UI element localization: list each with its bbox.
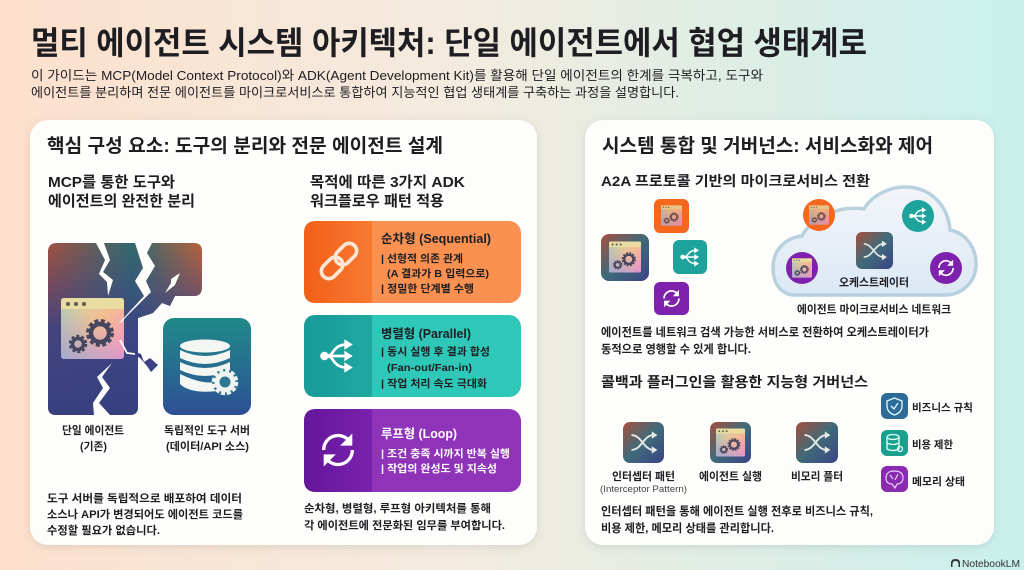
body text: governance — [601, 504, 873, 535]
card: sequential: 순차형 (Sequential) — [381, 231, 491, 246]
label: interceptor pattern: 인터셉터 패턴 — [612, 469, 675, 483]
body text: governance: 인터셉터 패턴을 통해 에이전트 실행 전후로 비즈니스 규칙, — [601, 504, 873, 518]
label: single agent: (기존) — [80, 439, 107, 453]
intro text — [31, 68, 763, 100]
card: loop — [304, 409, 521, 492]
subheading: MCP separation: MCP를 통한 도구와 — [48, 174, 175, 191]
card: parallel: 병렬형 (Parallel) — [381, 326, 471, 341]
icon: memory plugin — [796, 422, 838, 463]
card: parallel — [304, 315, 521, 397]
intro text: 이 가이드는 MCP(Model Context Protocol)와 ADK(Agent Development Kit)를 활용해 단일 에이전트의 한계를 극복하고, 도구와 — [31, 68, 763, 83]
card: sequential: | 선형적 의존 관계 — [381, 252, 463, 265]
body text: A2A: 에이전트를 네트워크 검색 가능한 서비스로 전환하여 오케스트레이터가 — [601, 325, 929, 339]
label: interceptor pattern: (Interceptor Pattern) — [600, 484, 687, 495]
card: loop: 루프형 (Loop) — [381, 426, 457, 441]
title: 멀티 에이전트 시스템 아키텍처: 단일 에이전트에서 협업 생태계로 — [31, 25, 867, 61]
icon: orange agent — [803, 199, 835, 231]
body text: tool server: 도구 서버를 독립적으로 배포하여 데이터 — [47, 491, 242, 505]
subheading: ADK workflow patterns: 워크플로우 패턴 적용 — [310, 193, 444, 210]
label: single agent — [62, 423, 124, 453]
icon: interceptor pattern — [623, 422, 664, 463]
icon: fan out — [320, 339, 353, 373]
label: agent microservice network: 에이전트 마이크로서비스 네트워크 — [797, 303, 951, 316]
card: sequential — [304, 221, 521, 303]
body text: workflow summary — [304, 501, 505, 532]
label: independent tool server — [164, 424, 250, 453]
body text: workflow summary: 순차형, 병렬형, 루프형 아키텍처를 통해 — [304, 501, 491, 515]
icon group: separate agents — [601, 199, 707, 315]
subheading: governance: 콜백과 플러그인을 활용한 지능형 거버넌스 — [601, 374, 868, 390]
icon: purple loop agent — [930, 252, 962, 284]
panel heading: system integration: 시스템 통합 및 거버넌스: 서비스화와 제어 — [602, 135, 933, 157]
body text: A2A: 동적으로 영행할 수 있게 합니다. — [601, 342, 751, 356]
intro text: 에이전트를 분리하며 전문 에이전트를 마이크로서비스로 통합하여 지능적인 협업 생태계를 구축하는 과정을 설명합니다. — [31, 85, 679, 100]
legend: cost limits: 비용 제한 — [912, 438, 953, 451]
icon: teal agent — [902, 200, 934, 232]
card: parallel: (Fan-out/Fan-in) — [387, 362, 472, 374]
subheading: ADK workflow patterns — [310, 174, 465, 210]
card: sequential: (A 결과가 B 입력으로) — [387, 267, 489, 280]
label: agent execution: 에이전트 실행 — [699, 469, 762, 483]
body text: tool server: 수정할 필요가 없습니다. — [47, 523, 160, 537]
label: memory plugin: 비모리 플터 — [791, 470, 843, 483]
cloud: agent microservice network — [773, 187, 976, 295]
label: orchestrator: 오케스트레이터 — [839, 275, 909, 289]
legend: memory state: 메모리 상태 — [912, 475, 965, 488]
legend: business rules — [881, 393, 973, 419]
watermark: NotebookLM: NotebookLM — [962, 558, 1020, 570]
icon: agent execution — [710, 422, 751, 463]
body text: tool server — [47, 491, 243, 537]
body text: A2A — [601, 325, 929, 356]
label: independent tool server: 독립적인 도구 서버 — [164, 424, 250, 437]
panel heading: core components: 핵심 구성 요소: 도구의 분리와 전문 에이전트 설계 — [47, 135, 443, 157]
panel: system integration — [585, 120, 994, 545]
subheading: MCP separation: 에이전트의 완전한 분리 — [48, 193, 195, 210]
icon: database server — [163, 318, 251, 415]
card: parallel: | 동시 실행 후 결과 합성 — [381, 345, 490, 358]
icon: loop arrows — [324, 434, 352, 466]
legend: memory state — [881, 466, 965, 492]
body text: tool server: 소스나 API가 변경되어도 에이전트 코드를 — [47, 507, 243, 521]
subheading: MCP separation — [48, 174, 195, 210]
legend: business rules: 비즈니스 규칙 — [912, 401, 973, 414]
label: single agent: 단일 에이전트 — [62, 423, 124, 437]
card: loop: | 작업의 완성도 및 지속성 — [381, 462, 497, 475]
card: parallel: | 작업 처리 속도 극대화 — [381, 377, 487, 390]
label: interceptor pattern — [600, 469, 687, 495]
panel: core components — [30, 120, 537, 545]
label: independent tool server: (데이터/API 소스) — [166, 439, 249, 453]
body text: governance: 비용 제한, 메모리 상태를 관리합니다. — [601, 521, 774, 535]
icon: orchestrator — [856, 232, 893, 269]
icon: chain link — [318, 240, 360, 282]
subheading: ADK workflow patterns: 목적에 따른 3가지 ADK — [310, 174, 465, 191]
icon: purple agent — [786, 252, 818, 284]
subheading: A2A: A2A 프로토콜 기반의 마이크로서비스 전환 — [601, 173, 870, 189]
icon: fractured single agent — [48, 243, 202, 415]
body text: workflow summary: 각 에이전트에 전문화된 임무를 부여합니다. — [304, 518, 505, 532]
card: sequential: | 정밀한 단계별 수행 — [381, 282, 474, 295]
legend: cost limits — [881, 430, 953, 456]
card: loop: | 조건 충족 시까지 반복 실행 — [381, 447, 510, 460]
